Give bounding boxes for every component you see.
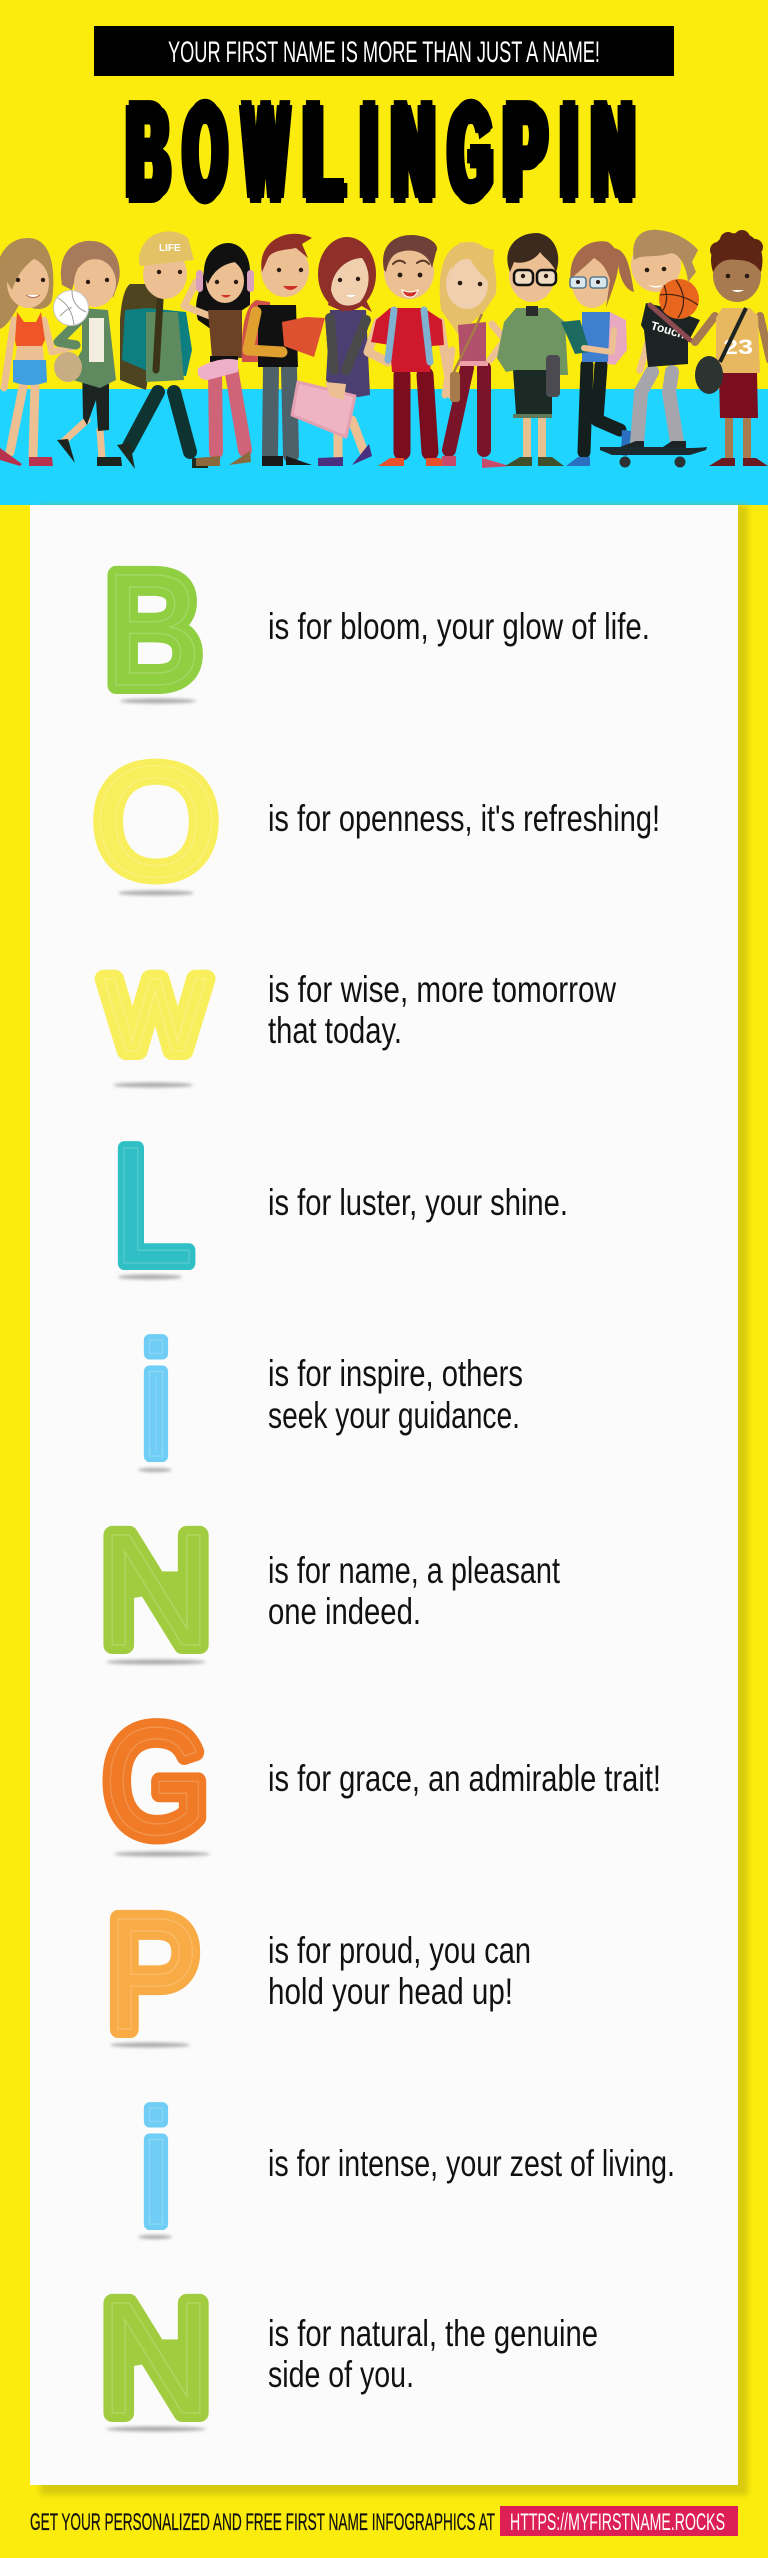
title: N [392,76,434,227]
letter i: i [139,2079,173,2258]
title: L [304,76,344,227]
text G: is for grace, an admirable trait! [268,1758,661,1799]
letter B: B [104,540,202,719]
person 3: hiker with cap [117,231,208,469]
person 12: boy with yellow tank: 23 [723,336,753,359]
letter i: i [139,1311,173,1490]
row W [103,956,616,1088]
text W: that today. [268,1010,402,1051]
text L: is for luster, your shine. [268,1182,568,1223]
row B [104,540,650,719]
text N2 [268,2313,598,2395]
title: I [561,76,577,227]
text P: is for proud, you can [268,1930,531,1971]
header banner [94,26,674,76]
illustration: group of people [0,230,768,469]
text N2: is for natural, the genuine [268,2313,598,2354]
text I: seek your guidance. [268,1395,520,1436]
text W [268,969,616,1051]
row L [112,1113,568,1299]
title [126,76,636,227]
letter L: L [112,1113,194,1299]
letter W: W [103,956,207,1074]
letter L: L [112,1113,194,1299]
row P [106,1884,531,2063]
person 5: red-haired guy with book [242,234,325,466]
text P [268,1930,531,2012]
row I2 [138,2079,675,2258]
white content panel [30,505,738,2485]
title: W [243,76,288,227]
person 1: girl in orange top [0,238,76,466]
text B: is for bloom, your glow of life. [268,606,650,647]
row O [93,733,660,909]
text N: one indeed. [268,1591,421,1632]
person 4: girl with headphones [184,243,254,466]
title: B [127,76,169,227]
title: I [361,76,377,227]
text W: is for wise, more tomorrow [268,969,616,1010]
person 3: hiker with cap: LIFE [159,243,181,254]
title: O [184,76,226,227]
letter N: N [99,1501,213,1679]
person 2: girl with volleyball [54,241,122,466]
footer [30,2506,738,2536]
floor band [0,389,768,505]
letter O: O [93,733,219,909]
text N [268,1550,561,1632]
person 8: blonde woman [440,242,510,468]
row G [104,1696,661,1867]
letter i: i [139,2079,173,2258]
text N2: side of you. [268,2354,414,2395]
text I [268,1353,523,1436]
text N: is for name, a pleasant [268,1550,561,1591]
letter N: N [99,2269,213,2447]
title: N [592,76,634,227]
person 11: skateboarder with basketball [600,230,707,468]
letter W: W [103,956,207,1074]
letter B: B [104,540,202,719]
row N [99,1501,561,1679]
letter P: P [106,1884,200,2063]
text O: is for openness, it's refreshing! [268,798,660,839]
person 6: woman with pink bag [292,237,376,466]
row N2 [99,2269,598,2447]
title: G [449,76,492,227]
letter i: i [139,1311,173,1490]
letter G: G [104,1696,208,1867]
text I: is for inspire, others [268,1353,523,1394]
person 12: boy with yellow tank [695,230,768,466]
person 7: guy in red shirt [368,235,454,466]
person 9: guy with glasses [497,233,568,466]
person 11: skateboarder with basketball: Touch [649,318,687,342]
letter O: O [93,733,219,909]
title: P [504,76,546,227]
text P: hold your head up! [268,1971,513,2012]
letter N: N [99,1501,213,1679]
person 10: girl with ponytail and glasses [561,241,634,466]
panel shadow [40,505,748,2495]
letter G: G [104,1696,208,1867]
letter P: P [106,1884,200,2063]
row I [138,1311,523,1490]
letter N: N [99,2269,213,2447]
